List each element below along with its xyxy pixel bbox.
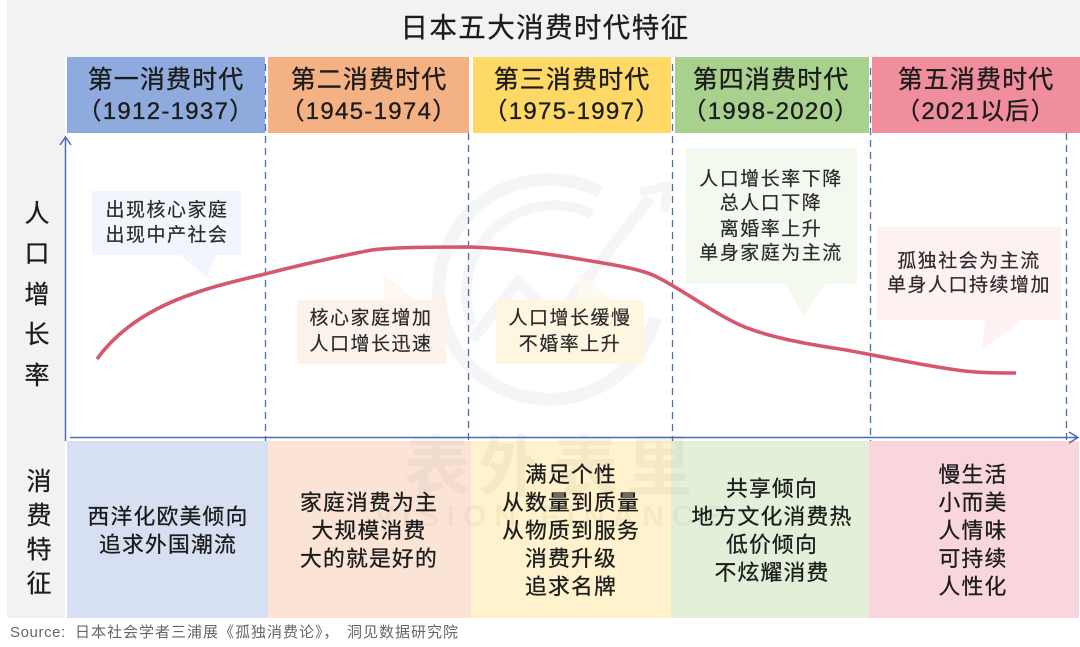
feature panel: third era: 消费升级	[525, 546, 617, 571]
x axis arrow	[70, 432, 1078, 443]
callout: fifth era	[877, 227, 1061, 350]
header: third era: （1975-1997）	[483, 98, 661, 125]
feature panel: first era	[67, 441, 268, 618]
header: fifth era: 第五消费时代	[898, 66, 1054, 94]
header: second era	[268, 57, 469, 133]
feature panel: first era: 追求外国潮流	[99, 532, 237, 557]
feature panel: fourth era: 共享倾向	[726, 476, 818, 501]
feature panel: first era: 西洋化欧美倾向	[88, 504, 248, 529]
callout: fourth era	[686, 148, 857, 316]
feature panel: fifth era: 慢生活	[938, 462, 1008, 487]
header: first era: 第一消费时代	[88, 66, 244, 94]
source note: 日本社会学者三浦展《孤独消费论》，	[75, 624, 340, 641]
callout: fourth era: 单身家庭为主流	[699, 242, 843, 264]
y axis label: 长	[24, 321, 50, 349]
callout: third era: 人口增长缓慢	[508, 307, 632, 329]
feature panel: fifth era: 可持续	[938, 546, 1008, 571]
callout: fifth era: 单身人口持续增加	[887, 274, 1051, 296]
callout: fourth era: 人口增长率下降	[699, 168, 843, 190]
callout: second era: 核心家庭增加	[309, 307, 433, 329]
y axis label: 人	[24, 200, 50, 228]
callout: first era: 出现核心家庭	[105, 199, 229, 221]
feature panel: fourth era: 不炫耀消费	[714, 560, 830, 585]
source note: 洞见数据研究院	[347, 623, 459, 641]
y axis label	[24, 200, 50, 390]
feature panel: fifth era: 人情味	[938, 518, 1008, 543]
feature panel: fifth era: 人性化	[938, 574, 1008, 599]
title: 日本五大消费时代特征	[400, 12, 690, 43]
y axis arrow	[60, 137, 71, 441]
feature panel: third era: 追求名牌	[525, 574, 617, 599]
callout: fourth era: 总人口下降	[720, 192, 822, 214]
callout: first era	[92, 191, 241, 277]
header: fourth era	[675, 57, 869, 133]
feature panel: fourth era	[671, 441, 869, 618]
watermark: logo	[439, 179, 668, 399]
feature panel: second era	[268, 441, 471, 618]
left grey label column	[7, 57, 65, 441]
callout: fourth era: 离婚率上升	[720, 218, 822, 240]
feature panel: third era	[471, 441, 671, 618]
left label: consumption features: 特	[26, 536, 52, 564]
feature panel: second era: 大的就是好的	[300, 546, 438, 571]
feature panel: third era: 从物质到服务	[502, 518, 640, 543]
era divider lines	[266, 64, 1066, 441]
callout: third era: 不婚率上升	[519, 333, 621, 355]
feature panel: fifth era	[869, 441, 1079, 618]
header: second era: （1945-1974）	[280, 98, 458, 125]
population growth curve	[97, 247, 1016, 373]
left label: consumption features	[7, 441, 65, 618]
callout: second era	[297, 274, 446, 364]
header: fifth era: （2021以后）	[896, 98, 1056, 125]
header: first era	[67, 57, 265, 133]
header: fourth era: 第四消费时代	[693, 66, 849, 94]
header: second era: 第二消费时代	[291, 66, 447, 94]
header: third era	[473, 57, 671, 133]
watermark: text: VISION FINANCE	[374, 500, 730, 533]
feature panel: third era: 满足个性	[525, 462, 617, 487]
header: third era: 第三消费时代	[494, 66, 650, 94]
top grey band	[7, 0, 1080, 57]
watermark: text: 表外表里	[404, 430, 700, 504]
y axis label: 口	[24, 240, 50, 268]
source note: Source:	[10, 624, 66, 641]
callout: fifth era: 孤独社会为主流	[897, 250, 1041, 272]
left label: consumption features: 消	[26, 468, 52, 496]
header: fifth era	[872, 57, 1080, 133]
callout: third era	[496, 273, 644, 364]
feature panel: second era: 大规模消费	[312, 518, 426, 543]
source note	[10, 623, 459, 641]
y axis label: 增	[24, 281, 50, 309]
left label: consumption features: 费	[26, 502, 52, 530]
y axis label: 率	[24, 362, 50, 390]
feature panel: third era: 从数量到质量	[502, 490, 640, 515]
watermark: text	[374, 430, 730, 533]
callout: second era: 人口增长迅速	[309, 333, 433, 355]
feature panel: fourth era: 低价倾向	[726, 532, 818, 557]
feature panel: second era: 家庭消费为主	[300, 490, 438, 515]
feature panel: fourth era: 地方文化消费热	[692, 504, 852, 529]
header: fourth era: （1998-2020）	[682, 98, 860, 125]
feature panel: fifth era: 小而美	[938, 490, 1008, 515]
header: first era: （1912-1937）	[77, 98, 255, 125]
callout: first era: 出现中产社会	[105, 224, 229, 246]
left label: consumption features: 征	[26, 570, 52, 598]
